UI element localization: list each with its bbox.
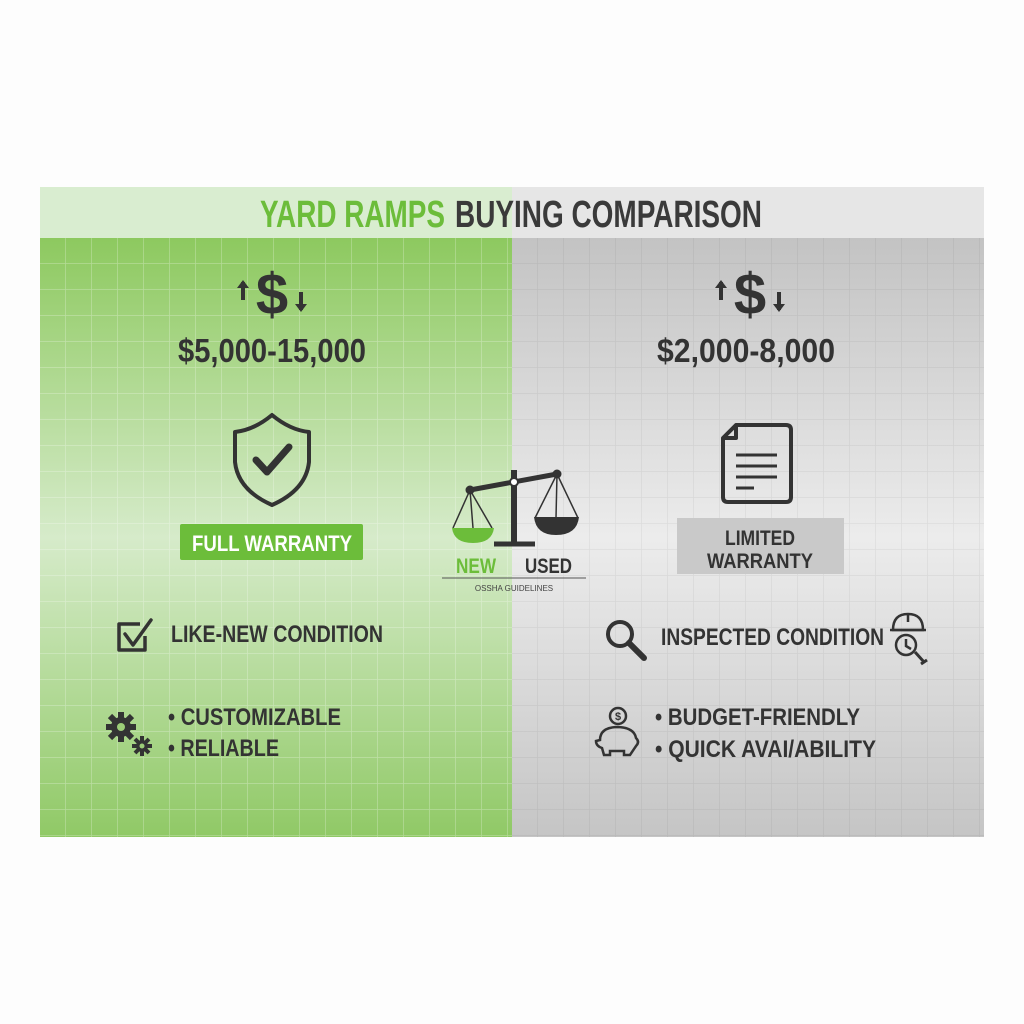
icon: shield — [235, 415, 309, 505]
label: new / used: USED — [525, 555, 572, 578]
panel: header bar — [40, 187, 984, 238]
text: price used: $2,000-8,000 — [657, 332, 835, 369]
icon: dollar arrows right: $ — [734, 262, 766, 327]
icon: dollar arrows left: $ — [256, 262, 288, 327]
badge: limited warranty: WARRANTY — [707, 550, 813, 573]
icon: checkbox — [119, 620, 151, 650]
title — [260, 194, 762, 236]
badge: full warranty — [180, 524, 363, 560]
title: BUYING COMPARISON — [455, 194, 762, 236]
badge: full warranty: FULL WARRANTY — [192, 531, 352, 556]
text: customizable reliable: • RELIABLE — [168, 735, 279, 762]
icon: magnifier — [608, 622, 644, 658]
text: budget-friendly quick availability: • QUICK AVAI/ABILITY — [655, 736, 876, 763]
label: new / used — [442, 555, 586, 593]
text: inspected condition: INSPECTED CONDITION — [661, 624, 884, 651]
title: YARD RAMPS — [260, 194, 445, 236]
icon: dollar arrows left — [237, 262, 307, 327]
icon: gears — [106, 712, 152, 756]
icon: piggy bank — [596, 708, 638, 755]
icon: balance scale — [452, 470, 579, 544]
text: budget-friendly quick availability — [655, 704, 876, 763]
text: price new: $5,000-15,000 — [178, 332, 366, 369]
text: customizable reliable: • CUSTOMIZABLE — [168, 704, 341, 731]
badge: limited warranty: LIMITED — [725, 527, 795, 550]
text: like-new condition: LIKE-NEW CONDITION — [171, 621, 383, 648]
icon: piggy bank: $ — [615, 711, 621, 723]
icon: document — [723, 425, 791, 502]
panel: used (right) — [512, 238, 984, 837]
text: customizable reliable — [168, 704, 341, 762]
icon: dollar arrows right — [715, 262, 785, 327]
label: new / used: NEW — [456, 555, 496, 578]
label: new / used: OSSHA GUIDELINES — [475, 584, 553, 593]
badge: limited warranty — [677, 518, 844, 574]
icon: helmet clock wrench — [890, 614, 927, 664]
panel: new (left) — [40, 238, 512, 837]
text: budget-friendly quick availability: • BUDGET-FRIENDLY — [655, 704, 860, 731]
